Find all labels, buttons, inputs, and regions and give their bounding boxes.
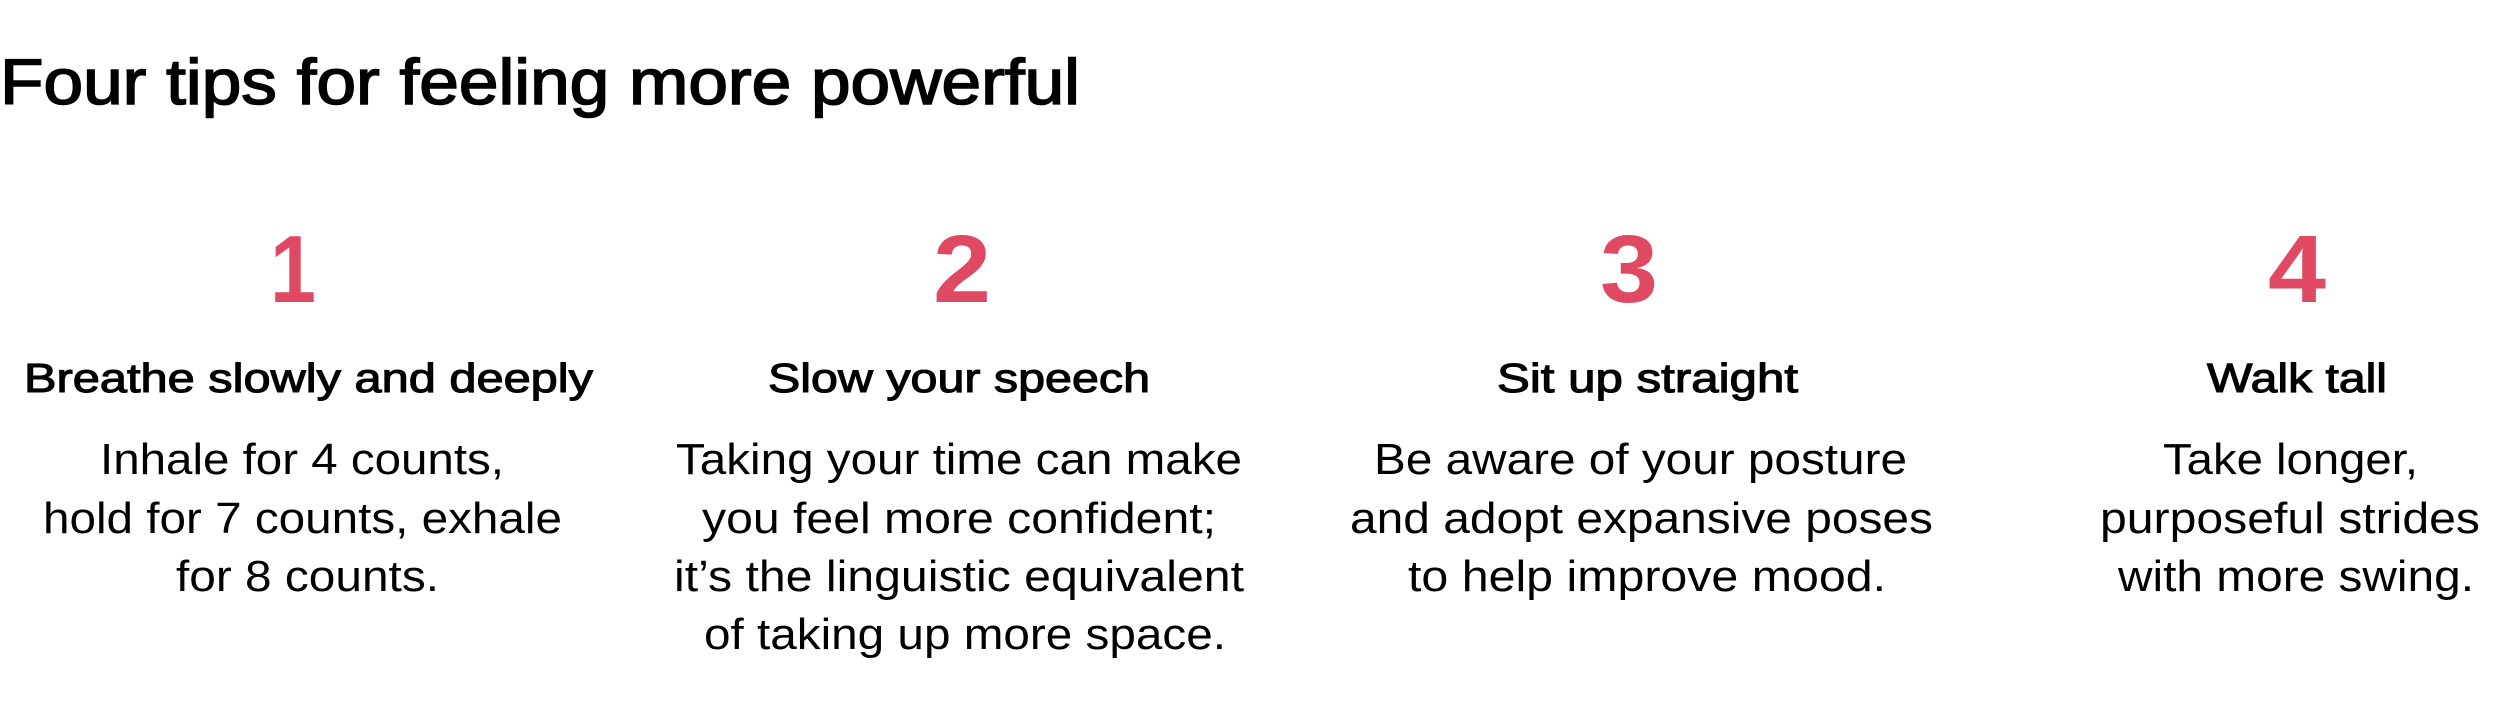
text block: tip 4: purposeful strides — [2100, 494, 2480, 543]
panel: tip 3 posture — [1350, 216, 1933, 601]
title: Four tips for feeling more powerful — [0, 46, 1080, 118]
text block: tip 4: Take longer, — [2163, 435, 2418, 484]
text block: tip 2: it’s the linguistic equivalent — [674, 552, 1244, 601]
text block: tip 1 — [43, 435, 562, 601]
number 4: 4 — [2268, 216, 2326, 323]
heading: tip 2: Slow your speech — [768, 355, 1150, 401]
text block: tip 3 — [1350, 435, 1933, 601]
text block: tip 4: with more swing. — [2117, 552, 2474, 601]
heading: tip 4: Walk tall — [2207, 355, 2387, 401]
number 3: 3 — [1600, 216, 1658, 323]
text block: tip 2: of taking up more space. — [704, 610, 1226, 659]
heading: tip 3: Sit up straight — [1497, 355, 1799, 401]
text block: tip 2: you feel more confident; — [702, 494, 1216, 543]
panel: tip 1 breathe — [24, 216, 594, 601]
text block: tip 3: and adopt expansive poses — [1350, 494, 1933, 543]
text block: tip 3: to help improve mood. — [1408, 552, 1886, 601]
text block: tip 1: for 8 counts. — [176, 552, 439, 601]
text block: tip 2: Taking your time can make — [676, 435, 1242, 484]
text block: tip 4 — [2100, 435, 2480, 601]
text block: tip 2 — [674, 435, 1244, 659]
heading: tip 1: Breathe slowly and deeply — [24, 355, 594, 401]
panel: tip 4 walk — [2100, 216, 2480, 601]
number 2: 2 — [933, 216, 991, 323]
text block: tip 1: hold for 7 counts, exhale — [43, 494, 562, 543]
number 1: 1 — [270, 216, 316, 323]
panel: tip 2 speech — [674, 216, 1244, 659]
text block: tip 3: Be aware of your posture — [1374, 435, 1907, 484]
text block: tip 1: Inhale for 4 counts, — [100, 435, 504, 484]
